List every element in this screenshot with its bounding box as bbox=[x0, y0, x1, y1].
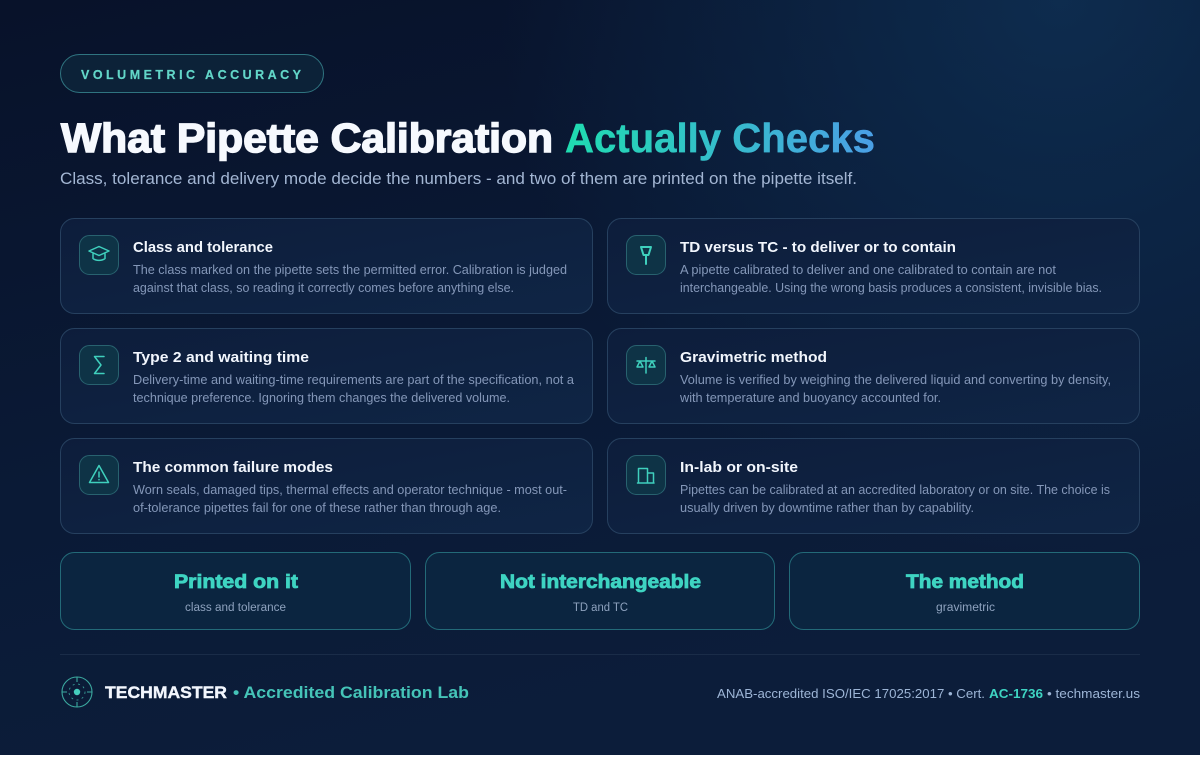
panel: common failure modes: Worn seals, damaged tips, thermal effects and operator technique - most out- bbox=[133, 483, 567, 497]
panel: class and tolerance: against that class, so reading it correctly comes before anything else. bbox=[133, 281, 514, 295]
stat: not interchangeable bbox=[426, 552, 774, 630]
panel: class and tolerance: The class marked on the pipette sets the permitted error. Calibration is judged bbox=[133, 263, 567, 277]
panel: gravimetric method: with temperature and buoyancy accounted for. bbox=[679, 391, 941, 405]
panel: class and tolerance: Class and tolerance bbox=[133, 239, 273, 256]
panel: type 2 and waiting time: technique preference. Ignoring them changes the delivered volume. bbox=[133, 391, 510, 405]
panel: common failure modes: of-tolerance pipettes fail for one of these rather than through age. bbox=[133, 501, 501, 515]
panel: type 2 and waiting time bbox=[60, 328, 592, 424]
panel: in-lab or on-site: Pipettes can be calibrated at an accredited laboratory or on site. The choice is bbox=[680, 483, 1110, 497]
panel: class and tolerance bbox=[60, 218, 592, 314]
icon: buildings bbox=[626, 456, 666, 494]
title: Actually Checks bbox=[565, 115, 875, 161]
footer logo bbox=[62, 677, 92, 707]
badge: volumetric accuracy bbox=[60, 54, 324, 92]
footer accreditation bbox=[717, 686, 1141, 701]
panel: in-lab or on-site: In-lab or on-site bbox=[680, 459, 798, 476]
panel: type 2 and waiting time: Type 2 and waiting time bbox=[133, 349, 309, 366]
panel: gravimetric method: Volume is verified by weighing the delivered liquid and converting by density, bbox=[680, 373, 1111, 387]
stat: the method: The method bbox=[906, 572, 1024, 593]
stat: not interchangeable: Not interchangeable bbox=[500, 572, 701, 593]
icon: funnel glass bbox=[626, 236, 666, 274]
stat: printed on it: Printed on it bbox=[174, 572, 299, 593]
panel: TD versus TC: TD versus TC - to deliver or to contain bbox=[680, 239, 956, 256]
title: What Pipette Calibration bbox=[61, 115, 553, 161]
panel: gravimetric method bbox=[608, 328, 1140, 424]
icon: balance scale bbox=[626, 346, 666, 384]
panel: TD versus TC bbox=[608, 218, 1140, 314]
panel: in-lab or on-site: usually driven by downtime rather than by capability. bbox=[680, 501, 974, 515]
footer accreditation: ANAB-accredited ISO/IEC 17025:2017 • Cert. bbox=[717, 686, 985, 701]
stat: not interchangeable: TD and TC bbox=[573, 602, 628, 614]
panel: common failure modes: The common failure modes bbox=[133, 459, 333, 476]
panel: common failure modes bbox=[60, 438, 592, 534]
panel: type 2 and waiting time: Delivery-time and waiting-time requirements are part of the specification, not a bbox=[133, 373, 574, 387]
footer accreditation: AC-1736 bbox=[989, 686, 1043, 701]
stat: the method bbox=[790, 552, 1140, 630]
stat: printed on it: class and tolerance bbox=[185, 602, 286, 614]
panel: in-lab or on-site bbox=[608, 438, 1140, 534]
subtitle: Class, tolerance and delivery mode decide the numbers - and two of them are printed on the pipette itself. bbox=[60, 170, 857, 188]
panel: gravimetric method: Gravimetric method bbox=[680, 349, 827, 366]
icon: graduation cap bbox=[80, 236, 118, 274]
footer accreditation: • techmaster.us bbox=[1047, 686, 1141, 701]
panel: TD versus TC: A pipette calibrated to deliver and one calibrated to contain are not bbox=[680, 263, 1057, 277]
title bbox=[61, 115, 875, 161]
footer brand: TECHMASTER bbox=[105, 683, 227, 702]
footer brand: • Accredited Calibration Lab bbox=[233, 683, 469, 702]
panel: TD versus TC: interchangeable. Using the wrong basis produces a consistent, invisible bias. bbox=[680, 281, 1102, 295]
badge: volumetric accuracy: VOLUMETRIC ACCURACY bbox=[81, 68, 302, 82]
stat: printed on it bbox=[60, 552, 410, 630]
icon: warning triangle bbox=[80, 456, 118, 494]
footer brand bbox=[105, 683, 469, 702]
stat: the method: gravimetric bbox=[936, 602, 995, 614]
icon: sigma bbox=[80, 346, 118, 384]
